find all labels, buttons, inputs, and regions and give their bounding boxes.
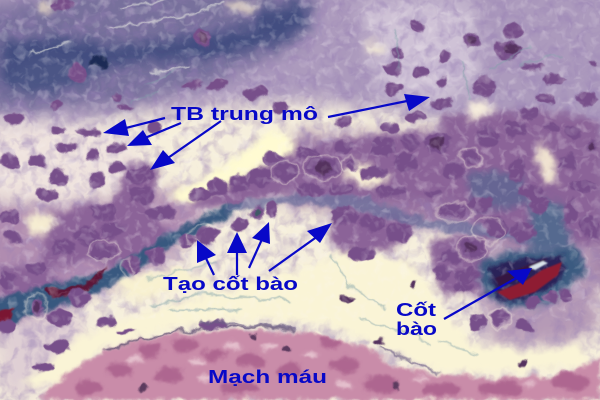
- arrow: Tạo cốt bào 4: [269, 223, 332, 271]
- vessel edge: [105, 326, 295, 352]
- arrow: TB trung mô to middle cell: [127, 123, 181, 146]
- blood vessel: [40, 326, 600, 400]
- right dark capillary: [488, 256, 565, 300]
- erythrocyte patches: [76, 337, 590, 397]
- arrow: Tạo cốt bào 1: [197, 240, 216, 275]
- pale gaps between erythrocytes: [128, 342, 538, 388]
- teal-blue mineralised matrix band: [0, 172, 588, 332]
- label: Mạch máu: Mạch máu: [208, 367, 327, 387]
- labels and arrows: [103, 94, 532, 387]
- right blood capillary (sharp core): [495, 258, 562, 300]
- dark blue matrix top left: [0, 2, 312, 95]
- arrow: TB trung mô to left cell: [103, 118, 165, 136]
- label: TB trung mô: TB trung mô: [171, 104, 318, 124]
- vessel nuclei: [138, 334, 399, 392]
- arrow: Cốt bào: [444, 268, 532, 319]
- label: Cốt bào: bào: [396, 319, 437, 339]
- darker nuclei: [33, 32, 597, 365]
- dense cell masses: [0, 110, 600, 320]
- arrow: Tạo cốt bào 2: [227, 232, 247, 275]
- arrow: TB trung mô to lower cell: [150, 121, 221, 170]
- label: Cốt bào: [396, 300, 437, 339]
- arrow: TB trung mô to right cell: [328, 94, 430, 117]
- arrow: Tạo cốt bào 3: [249, 222, 270, 268]
- pale cell halos: [25, 147, 510, 329]
- light mottling: [0, 0, 600, 320]
- label: Tạo cốt bào: Tạo cốt bào: [163, 274, 298, 294]
- label: Cốt bào: Cốt: [396, 300, 436, 320]
- upper right matrix: [465, 172, 530, 212]
- left blood capillary: [45, 262, 108, 298]
- right matrix halo: [480, 246, 588, 306]
